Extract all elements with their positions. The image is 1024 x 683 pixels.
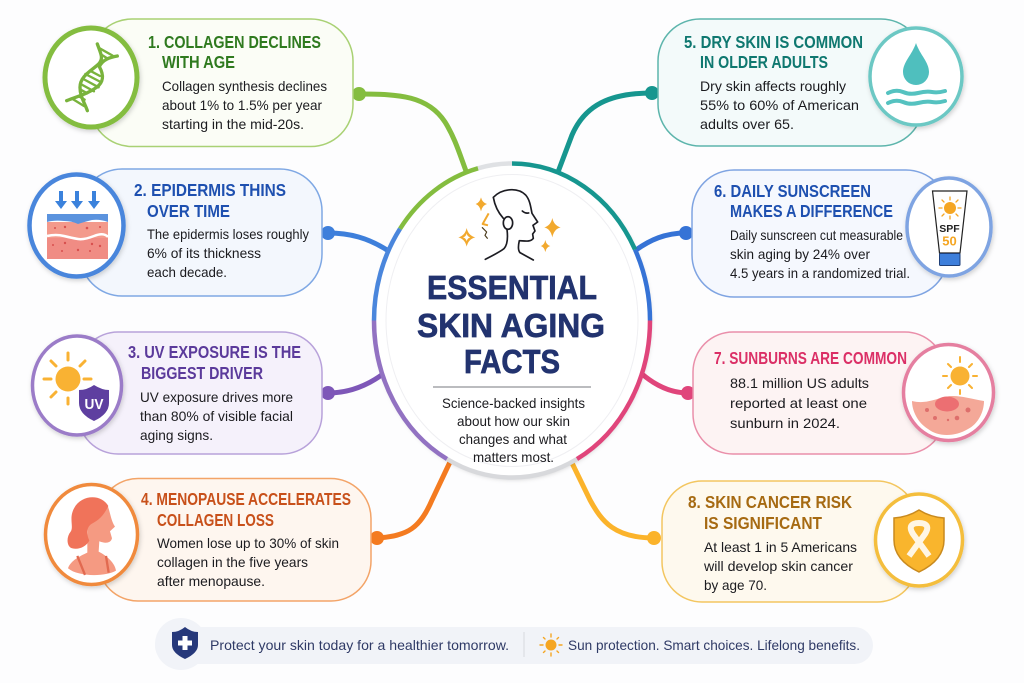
- connector 8: [572, 463, 661, 545]
- connector 1: [352, 87, 466, 171]
- body text: [700, 78, 859, 132]
- icon: DNA helix: [45, 28, 137, 127]
- body text: [140, 389, 293, 443]
- panel: fact 1: [45, 19, 353, 146]
- icon: sun: [540, 634, 562, 656]
- body text: than 80% of visible facial: [140, 408, 293, 424]
- footer message right: Sun protection. Smart choices. Lifelong benefits.: [568, 637, 860, 653]
- subtitle: Science-backed insights: [442, 395, 585, 411]
- heading: [134, 180, 286, 221]
- body text: Dry skin affects roughly: [700, 78, 846, 94]
- body text: Daily sunscreen cut measurable: [730, 227, 903, 243]
- body text: The epidermis loses roughly: [147, 226, 309, 242]
- body text: starting in the mid-20s.: [162, 116, 304, 132]
- connector 5: [558, 86, 659, 172]
- heading: 5. DRY SKIN IS COMMON: [684, 32, 863, 52]
- icon: face with sparkles: [458, 190, 561, 260]
- connector 2: [321, 226, 387, 250]
- title: SKIN AGING: [417, 308, 605, 345]
- heading: 1. COLLAGEN DECLINES: [148, 32, 321, 52]
- panel: fact 5: [658, 19, 962, 146]
- icon: shield with ribbon: [876, 494, 962, 586]
- body text: adults over 65.: [700, 116, 794, 132]
- body text: 6% of its thickness: [147, 245, 261, 261]
- heading: 4. MENOPAUSE ACCELERATES: [141, 489, 351, 509]
- heading: [684, 32, 863, 72]
- heading: [688, 492, 852, 533]
- title: ESSENTIAL: [427, 270, 597, 307]
- heading: COLLAGEN LOSS: [157, 510, 274, 530]
- heading: 7. SUNBURNS ARE COMMON: [714, 348, 907, 368]
- body text: collagen in the five years: [157, 554, 308, 570]
- icon: water drop and waves: [870, 28, 962, 125]
- heading: MAKES A DIFFERENCE: [730, 201, 893, 221]
- icon: sunburned skin: [904, 344, 994, 440]
- heading: WITH AGE: [162, 52, 235, 72]
- body text: 55% to 60% of American: [700, 97, 859, 113]
- body text: reported at least one: [730, 395, 867, 411]
- heading: IN OLDER ADULTS: [700, 52, 828, 72]
- icon: SPF 50 sunscreen tube: [907, 178, 991, 276]
- icon: woman profile: [46, 484, 138, 584]
- icon: skin layers with arrows: [30, 174, 124, 276]
- panel: fact 3: [32, 332, 322, 454]
- subtitle: about how our skin: [457, 413, 570, 429]
- body text: UV exposure drives more: [140, 389, 293, 405]
- icon: sun and UV shield: [32, 336, 122, 435]
- body text: [147, 226, 309, 280]
- panel: fact 7: [693, 332, 994, 454]
- heading: BIGGEST DRIVER: [141, 363, 263, 383]
- icon: SPF 50 sunscreen tube: 50: [942, 234, 957, 248]
- body text: by age 70.: [704, 577, 767, 593]
- body text: 88.1 million US adults: [730, 375, 869, 391]
- body text: 4.5 years in a randomized trial.: [730, 265, 910, 281]
- heading: [128, 342, 301, 383]
- body text: [730, 375, 869, 431]
- heading: [148, 32, 321, 72]
- footer message left: Protect your skin today for a healthier tomorrow.: [210, 637, 509, 653]
- icon: sun and UV shield: UV: [84, 396, 104, 413]
- subtitle: changes and what: [459, 431, 567, 447]
- body text: At least 1 in 5 Americans: [704, 539, 857, 555]
- body text: sunburn in 2024.: [730, 415, 840, 431]
- subtitle: [442, 395, 585, 465]
- connector 6: [636, 226, 693, 250]
- heading: OVER TIME: [147, 201, 230, 221]
- body text: each decade.: [147, 264, 227, 280]
- heading: IS SIGNIFICANT: [704, 513, 822, 533]
- body text: [157, 535, 339, 589]
- body text: skin aging by 24% over: [730, 246, 870, 262]
- connector 4: [370, 462, 450, 545]
- heading: [141, 489, 351, 530]
- body text: after menopause.: [157, 573, 265, 589]
- panel: fact 8: [662, 481, 962, 602]
- connector 3: [321, 374, 383, 400]
- body text: [703, 539, 857, 593]
- panel: fact 4: [46, 478, 371, 601]
- connector 7: [642, 374, 695, 400]
- heading: 3. UV EXPOSURE IS THE: [128, 342, 301, 362]
- panel: fact 2: [30, 169, 322, 296]
- body text: Collagen synthesis declines: [162, 78, 327, 94]
- heading: 8. SKIN CANCER RISK: [688, 492, 852, 512]
- body text: Women lose up to 30% of skin: [157, 535, 339, 551]
- heading: 6. DAILY SUNSCREEN: [714, 181, 871, 201]
- body text: aging signs.: [140, 427, 213, 443]
- title: [417, 270, 605, 381]
- heading: 2. EPIDERMIS THINS: [134, 180, 286, 200]
- title: FACTS: [464, 344, 560, 381]
- footer banner: [155, 618, 873, 670]
- heading: [714, 181, 893, 221]
- body text: [730, 227, 910, 281]
- subtitle: matters most.: [473, 449, 554, 465]
- icon: SPF 50 sunscreen tube: SPF: [939, 223, 960, 235]
- icon: shield with cross: [172, 627, 198, 659]
- panel: central title circle: [374, 163, 650, 478]
- panel: fact 6: [692, 170, 991, 297]
- body text: about 1% to 1.5% per year: [162, 97, 322, 113]
- body text: will develop skin cancer: [703, 558, 853, 574]
- body text: [162, 78, 327, 132]
